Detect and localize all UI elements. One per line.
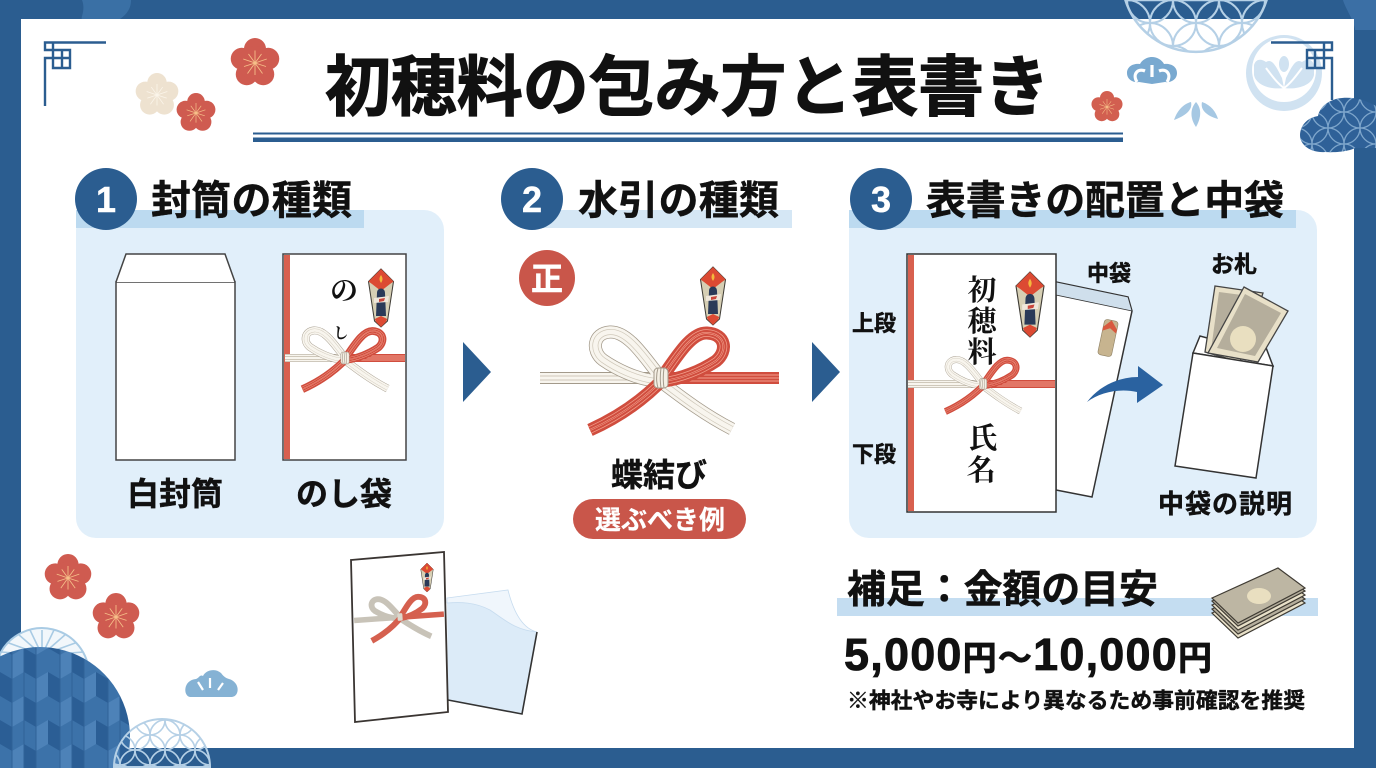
icon: bamboo leaves: [1174, 102, 1218, 127]
label: lower section: 下段: [852, 442, 896, 467]
step 3 heading: 表書きの配置と中袋: [926, 179, 1284, 223]
note: ※神社やお寺により異なるため事前確認を推奨: [847, 688, 1305, 713]
icon: stack of bills: [1212, 568, 1305, 638]
step 2 heading: 水引の種類: [578, 179, 779, 223]
upper name text: 初: [967, 274, 997, 307]
icon: pine cloud top right: [1127, 57, 1177, 84]
noshi envelope: の: [330, 276, 358, 307]
upper name text: 穂: [967, 305, 999, 338]
upper name text: 料: [967, 336, 997, 369]
recommended pill: [573, 499, 746, 539]
label: upper section: 上段: [852, 311, 896, 336]
illustration: noshi envelope with inner sheet: [351, 552, 537, 722]
step 3 heading: [849, 168, 1296, 230]
lower name text: 名: [966, 454, 996, 487]
envelope with bills: [1175, 286, 1288, 478]
label: butterfly knot: 蝶結び: [611, 457, 707, 493]
decoration: bottom-left yagasuri circle: [0, 647, 130, 768]
step 1 heading: 1: [96, 179, 116, 220]
title double rule: [253, 132, 1123, 142]
butterfly knot mizuhiki: [540, 332, 779, 430]
decoration: top-right shippo circle: [1125, 0, 1267, 52]
step 2 heading: 2: [522, 179, 542, 220]
decoration: bottom shippo circle: [114, 719, 210, 767]
main envelope: [907, 254, 1056, 512]
blue inner sheet: [447, 590, 537, 714]
amount: 5,000円〜10,000円: [844, 629, 1212, 680]
arrow: into envelope: [1087, 366, 1163, 403]
upper name text: [967, 274, 999, 369]
inner envelope behind: [1056, 282, 1132, 497]
decoration: top-right corner knot: [1271, 42, 1332, 100]
step 1 heading: [75, 168, 364, 230]
panel: supplementary amount: [837, 568, 1318, 713]
panel: step 1 envelope types: [75, 168, 444, 538]
decoration: plum blossoms bottom left: [45, 554, 139, 638]
step 2 heading: [501, 168, 792, 230]
supplement heading: 補足：金額の目安: [847, 569, 1158, 612]
decoration: crest circle: [1246, 35, 1322, 111]
tilted envelope: [351, 552, 448, 722]
supplement heading: [837, 569, 1318, 616]
icon: pine cloud bottom: [185, 670, 238, 697]
decoration: plum blossoms top left: [136, 38, 279, 131]
label: inner envelope: 中袋: [1087, 261, 1131, 286]
label: white envelope: 白封筒: [127, 476, 223, 512]
arrow: step 2 to 3: [812, 342, 840, 402]
lower name text: [966, 422, 998, 487]
noshi envelope: [283, 254, 406, 460]
arrow: step 1 to 2: [463, 342, 491, 402]
decoration: bottom-left fan circle: [0, 627, 88, 661]
correct badge: [519, 250, 575, 306]
label: bills: お札: [1211, 251, 1257, 277]
noshi envelope: し: [333, 326, 349, 342]
title: 初穂料の包み方と表書き: [325, 50, 1050, 124]
correct badge: 正: [531, 261, 563, 297]
decoration: plum blossom right of title: [1091, 91, 1123, 121]
decoration: top-right patterned cloud: [1300, 98, 1376, 152]
decoration: top-left corner knot: [45, 42, 106, 106]
icon: noshi ornament: [700, 267, 726, 325]
lower name text: 氏: [968, 422, 998, 455]
panel: step 2 mizuhiki: [501, 168, 792, 539]
step 3 heading: 3: [871, 179, 891, 220]
label: noshi envelope: のし袋: [296, 476, 392, 512]
step 1 heading: 封筒の種類: [151, 179, 352, 223]
panel: step 3 placement: [849, 168, 1317, 538]
recommended pill: 選ぶべき例: [595, 505, 725, 535]
plain white envelope: [116, 254, 235, 460]
label: inner envelope note: 中袋の説明: [1158, 489, 1292, 519]
